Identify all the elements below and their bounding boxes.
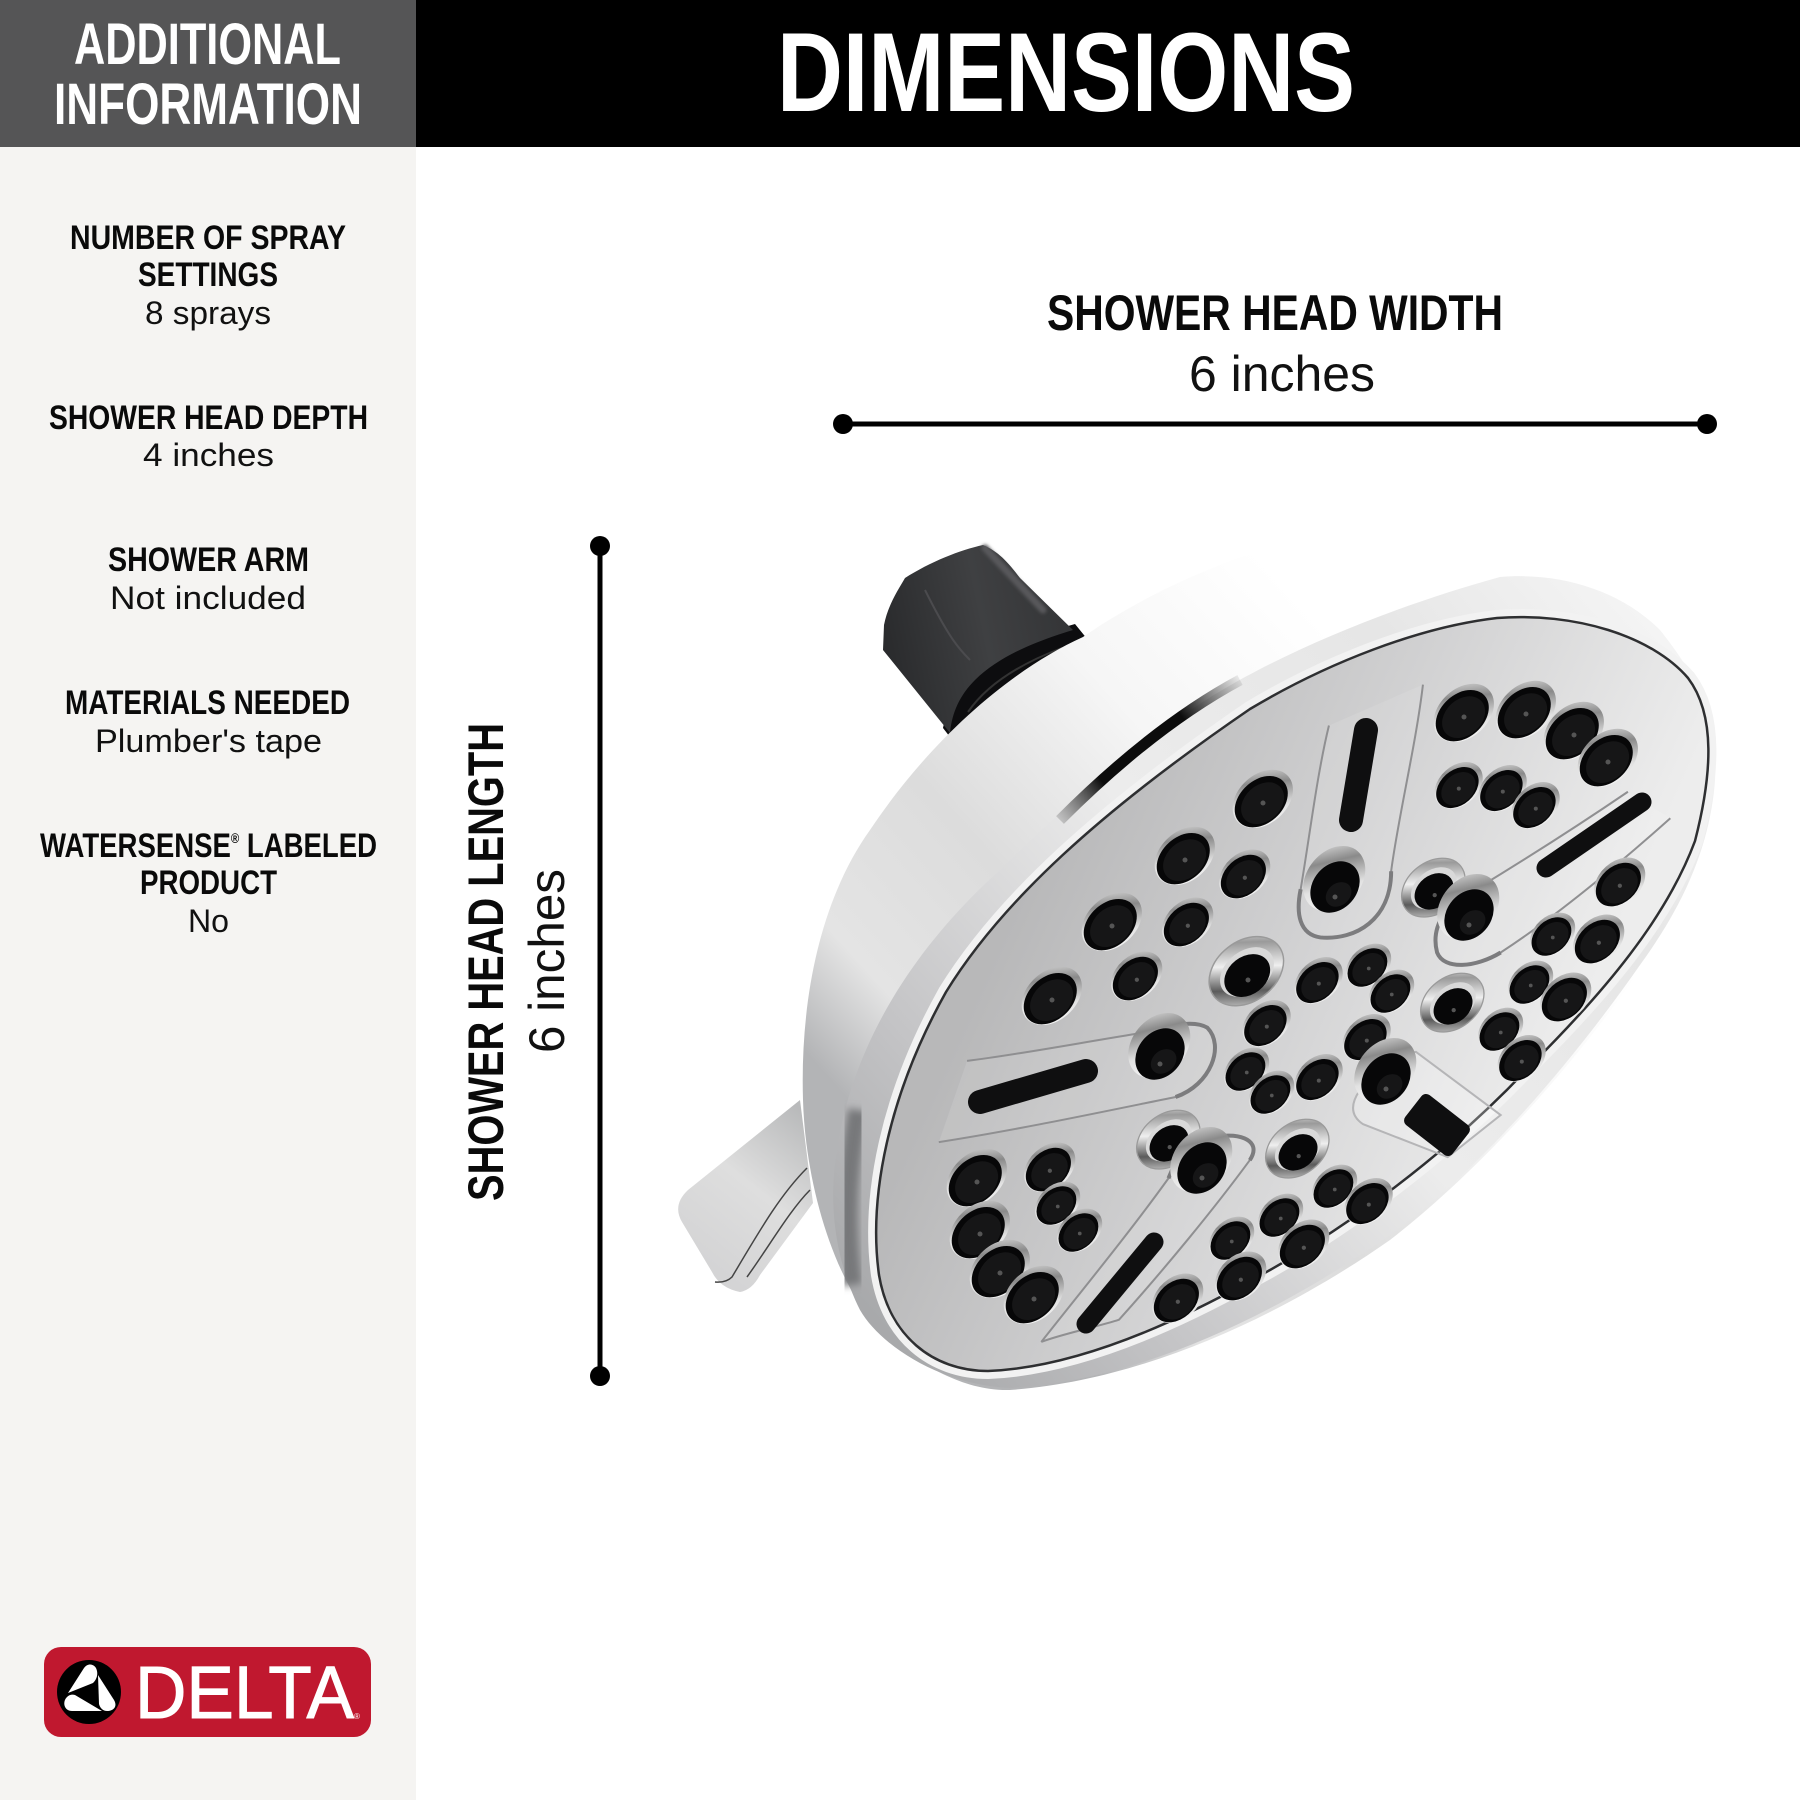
label: shower head length: 6 inches: [519, 869, 575, 1053]
label: shower head width: 6 inches: [1189, 346, 1375, 402]
text block: materials needed: [65, 684, 350, 759]
text block: watersense labeled product: ®: [231, 830, 240, 846]
dimension line: length: [590, 536, 610, 1386]
text block: number of spray settings: [70, 219, 346, 331]
text block: number of spray settings: SETTINGS: [138, 256, 278, 294]
nozzles: upper left: [1010, 758, 1304, 1037]
illustration: shower head: [678, 527, 1717, 1390]
chrome rim: [833, 576, 1715, 1388]
text block: shower head depth: [49, 399, 368, 473]
text block: materials needed: Plumber's tape: [95, 723, 322, 759]
slots: [980, 730, 1642, 1324]
text block: shower head depth: SHOWER HEAD DEPTH: [49, 399, 368, 437]
title: dimensions: DIMENSIONS: [777, 10, 1355, 135]
text block: shower arm: [108, 541, 309, 616]
text block: number of spray settings: 8 sprays: [145, 295, 271, 331]
rim stripe: upper left: [1060, 680, 1240, 820]
text block: shower arm: SHOWER ARM: [108, 541, 309, 579]
wedge: [1353, 1052, 1501, 1157]
nozzles: upper right: [1422, 669, 1649, 838]
label: shower head width: SHOWER HEAD WIDTH: [1047, 285, 1503, 341]
rim stripe: lower left: [848, 1110, 858, 1285]
label: shower head length: [458, 723, 575, 1201]
back dome: [803, 527, 1717, 1390]
text block: shower arm: Not included: [110, 580, 306, 616]
nozzles: lower left: [935, 1132, 1111, 1336]
text block: watersense labeled product: No: [188, 903, 229, 939]
spray face: [876, 617, 1708, 1371]
logo: delta: DELTA: [135, 1651, 355, 1734]
heading: additional information: INFORMATION: [54, 72, 362, 137]
text block: materials needed: MATERIALS NEEDED: [65, 684, 350, 722]
text block: watersense labeled product: PRODUCT: [140, 864, 277, 902]
logo: delta: ®: [354, 1712, 360, 1721]
fins: [939, 685, 1670, 1342]
nozzles: center ring: [1215, 935, 1423, 1123]
header bar: dimensions: [416, 0, 1800, 147]
text block: watersense labeled product: [40, 827, 377, 939]
heading: additional information: [54, 12, 362, 137]
panel: additional information sidebar: [0, 0, 416, 1800]
logo: delta: [44, 1647, 371, 1737]
nozzles: bottom: [1142, 1156, 1402, 1333]
arm nut: [883, 545, 1073, 733]
fin: top: [1299, 685, 1423, 938]
text block: watersense labeled product: LABELED: [239, 827, 377, 865]
text block: number of spray settings: NUMBER OF SPRAY: [70, 219, 346, 257]
fin: right: [1436, 792, 1670, 965]
label: shower head width: [1047, 285, 1503, 402]
heading: additional information: ADDITIONAL: [74, 12, 341, 77]
dimension line: width: [833, 414, 1717, 434]
fin loop highlights: [1137, 871, 1501, 1178]
nozzles: large teardrops: [1115, 834, 1512, 1204]
face ring: [876, 617, 1708, 1371]
square slot: [1402, 1092, 1472, 1158]
fin: bottom: [1041, 1136, 1254, 1342]
nozzles: chrome ringed: [1125, 846, 1495, 1190]
fin: left: [939, 1024, 1215, 1142]
threaded connector: [943, 624, 1088, 750]
lever: [678, 1100, 813, 1292]
nozzles: right: [1469, 847, 1655, 1091]
text block: watersense labeled product: WATERSENSE: [40, 827, 276, 865]
text block: shower head depth: 4 inches: [143, 437, 274, 473]
label: shower head length: SHOWER HEAD LENGTH: [458, 723, 514, 1201]
